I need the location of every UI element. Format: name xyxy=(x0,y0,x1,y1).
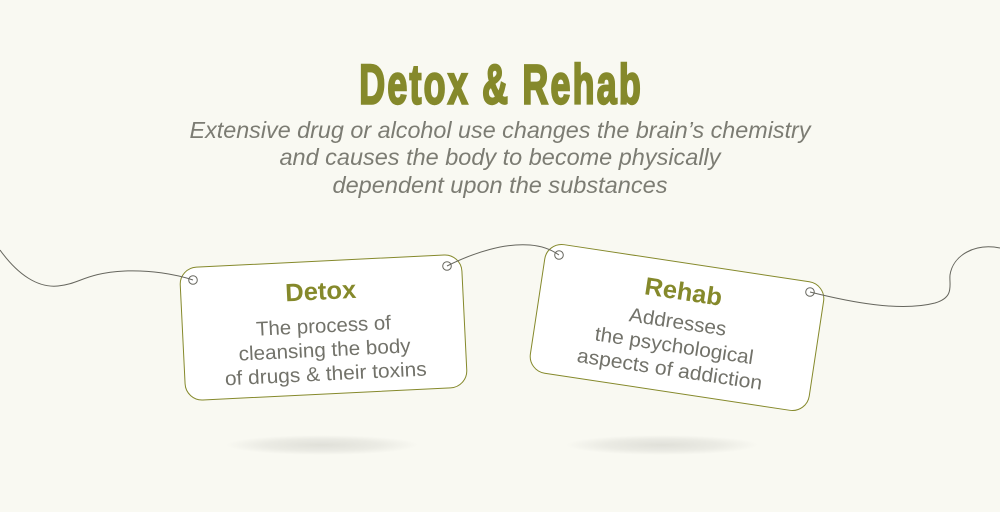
card text: rehab xyxy=(575,298,771,395)
string: left segment xyxy=(0,250,193,286)
hole: rehab right xyxy=(806,288,814,296)
card text: detox: The process of xyxy=(255,312,392,341)
card text: detox: cleansing the body xyxy=(238,335,411,366)
title: Detox & Rehab xyxy=(359,52,641,115)
subtitle: and causes the body to become physically xyxy=(280,144,722,170)
hole: detox right xyxy=(443,262,451,270)
string: right segment xyxy=(810,247,1000,307)
card: rehab xyxy=(528,242,826,413)
card text: detox: of drugs & their toxins xyxy=(224,359,427,390)
shadow: detox card xyxy=(226,435,418,455)
card text: rehab: Addresses xyxy=(628,304,728,341)
card heading: detox: Detox xyxy=(285,276,357,307)
subtitle: dependent upon the substances xyxy=(332,172,668,198)
string: middle segment xyxy=(447,245,559,266)
card text: rehab: aspects of addiction xyxy=(575,345,764,395)
card text: detox xyxy=(222,311,427,390)
shadow: rehab card xyxy=(566,435,758,455)
card text: rehab: the psychological xyxy=(593,323,755,369)
card: detox xyxy=(179,254,468,401)
subtitle: Extensive drug or alcohol use changes the brain’s chemistry xyxy=(190,117,812,143)
subtitle xyxy=(190,117,812,198)
hole: detox left xyxy=(189,276,197,284)
card heading: rehab: Rehab xyxy=(643,272,724,312)
hole: rehab left xyxy=(555,251,563,259)
